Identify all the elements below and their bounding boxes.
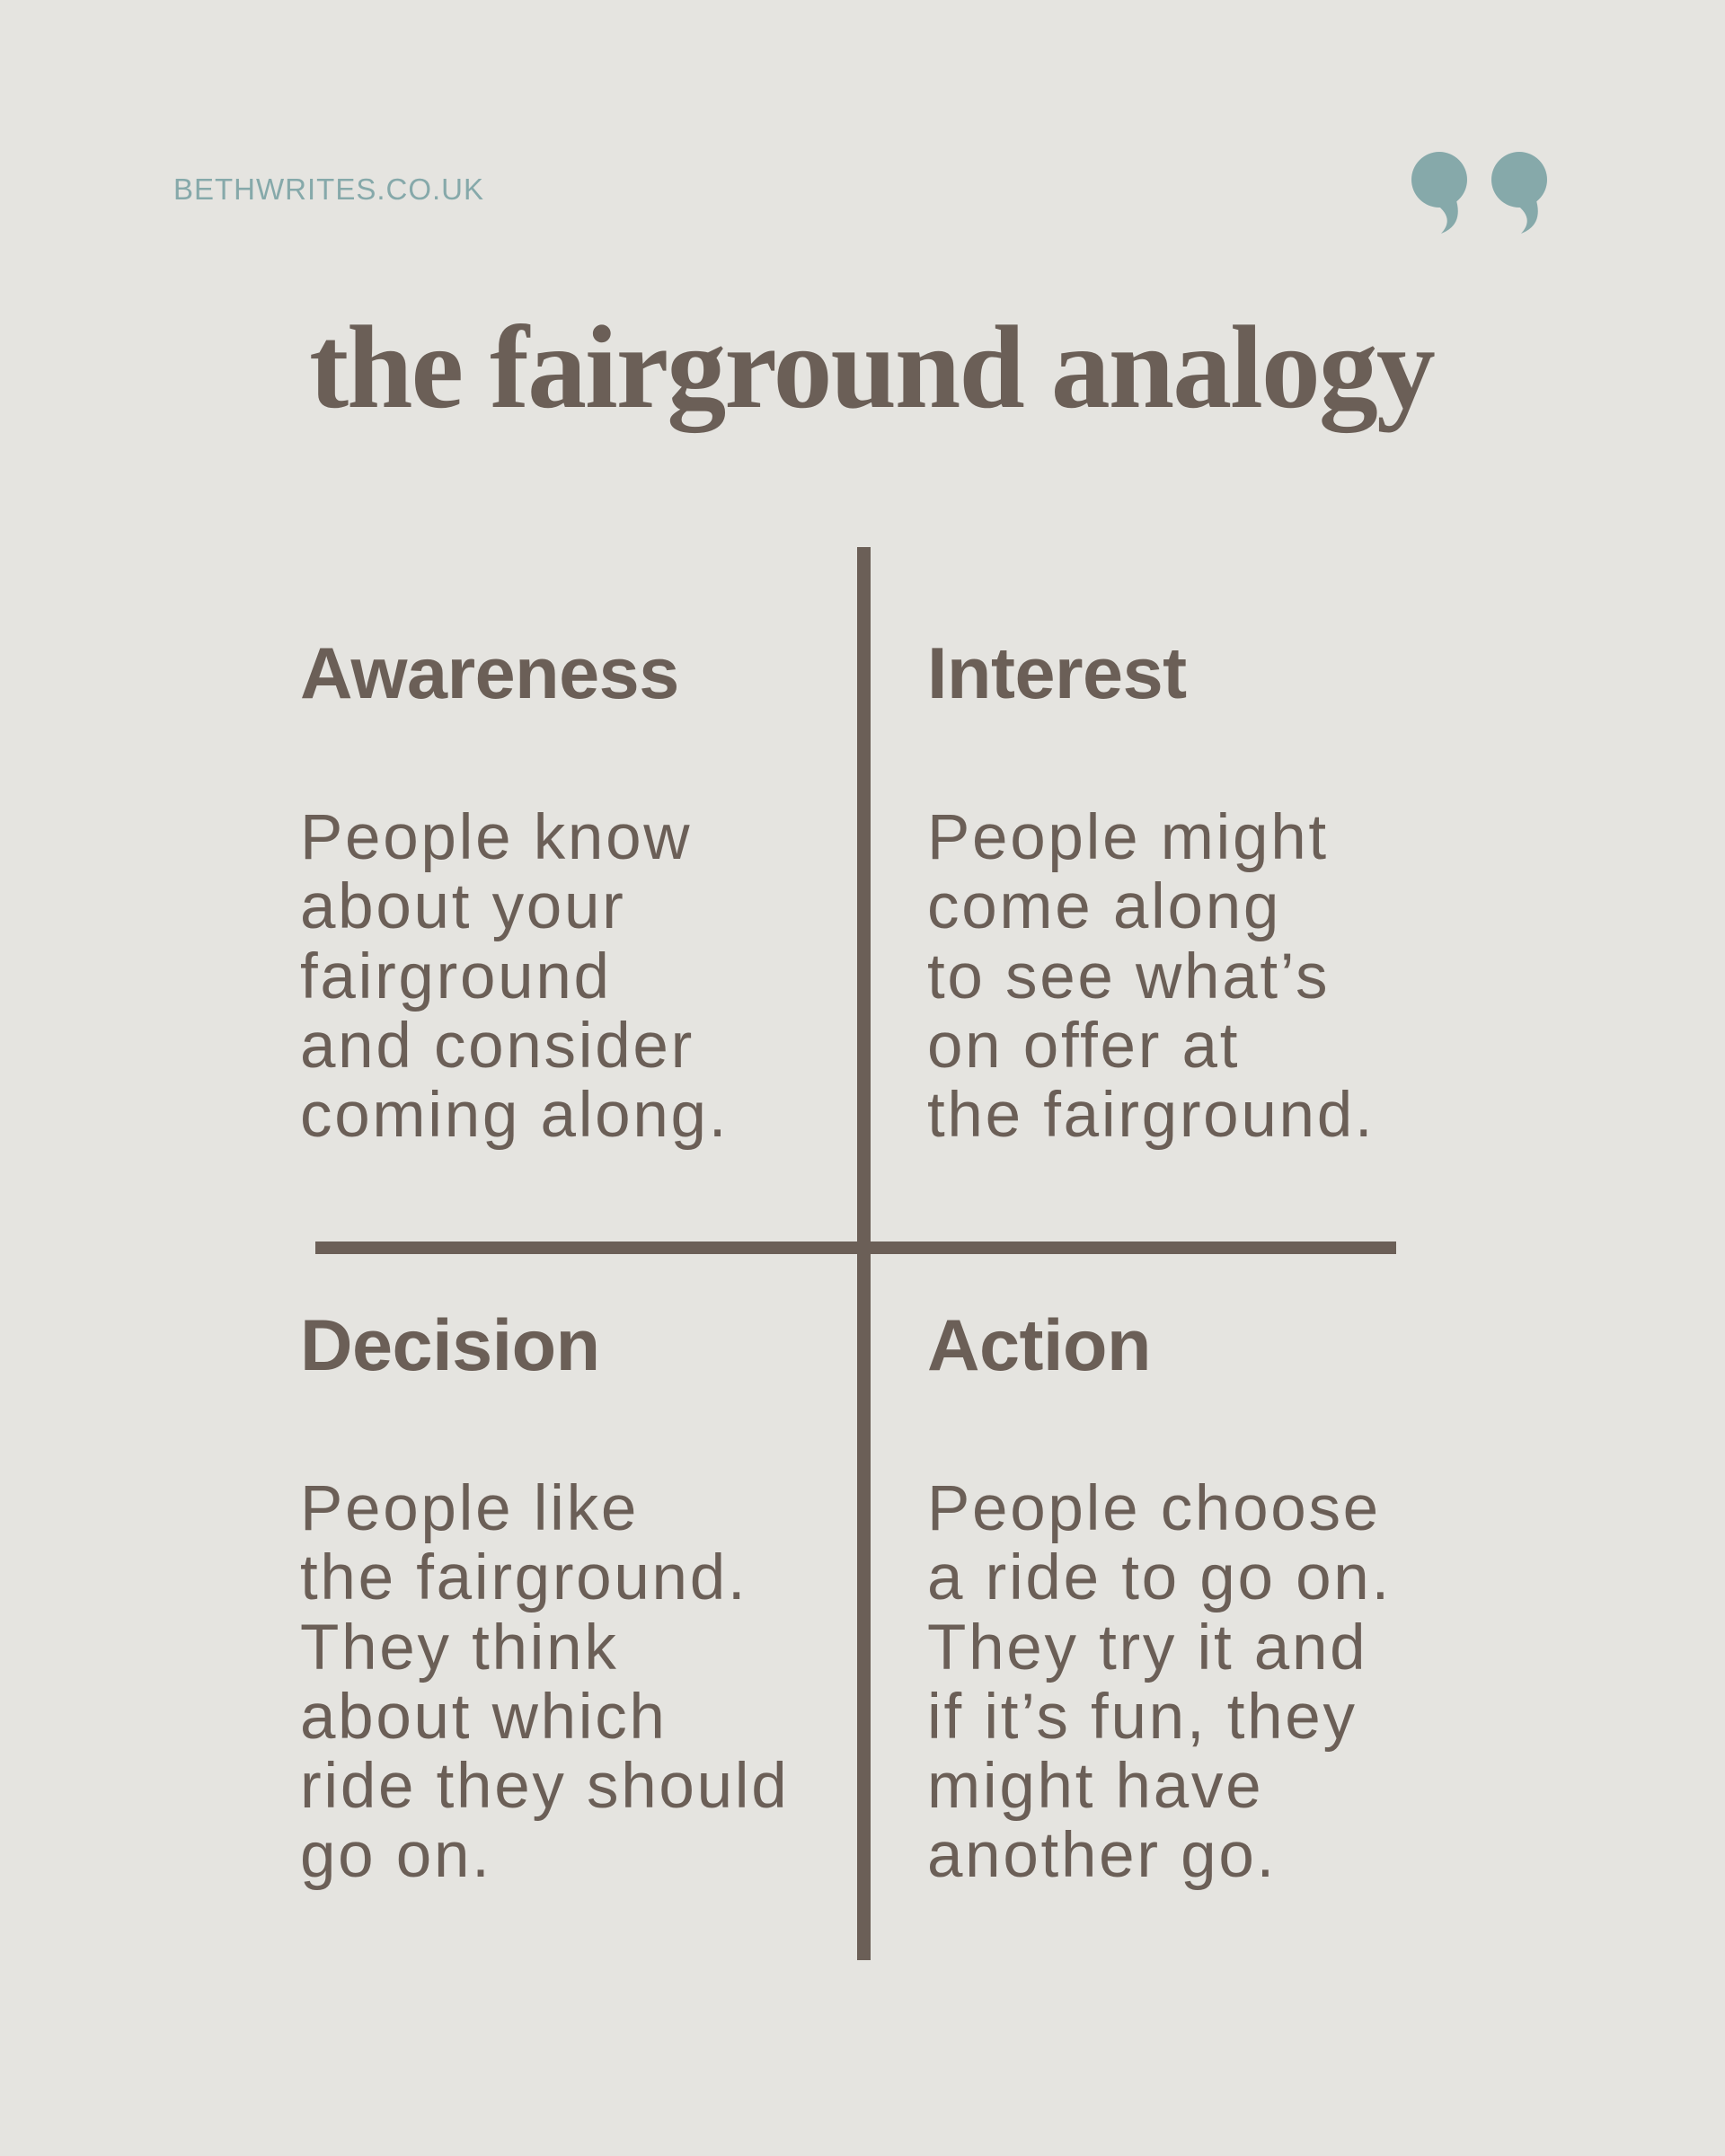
text: awareness: fairground [300, 941, 612, 1012]
text: awareness: coming along. [300, 1080, 729, 1151]
text: action [927, 1473, 1392, 1891]
text: awareness: about your [300, 871, 626, 942]
text: action: They try it and [927, 1613, 1367, 1683]
site url: BETHWRITES.CO.UK [173, 172, 484, 206]
panel: awareness [300, 633, 729, 1151]
text: interest: on offer at [927, 1011, 1240, 1082]
text: interest: to see what’s [927, 941, 1330, 1012]
heading: awareness: Awareness [300, 633, 679, 714]
heading: decision: Decision [300, 1305, 600, 1386]
text: awareness: and consider [300, 1011, 694, 1082]
text: decision: about which [300, 1682, 668, 1753]
panel: interest [927, 633, 1375, 1151]
text: action: another go. [927, 1820, 1277, 1891]
text: decision: People like [300, 1473, 639, 1544]
panel: action [927, 1305, 1392, 1891]
text: awareness: People know [300, 802, 692, 873]
panel: decision [300, 1305, 789, 1891]
text: decision: the fairground. [300, 1542, 748, 1613]
text: decision: go on. [300, 1820, 492, 1891]
text: action: if it’s fun, they [927, 1682, 1358, 1753]
text: awareness [300, 802, 729, 1151]
text: decision [300, 1473, 789, 1891]
text: action: a ride to go on. [927, 1542, 1392, 1613]
vertical divider [857, 547, 871, 1960]
horizontal divider [315, 1241, 1396, 1254]
text: interest: the fairground. [927, 1080, 1375, 1151]
text: interest [927, 802, 1375, 1151]
heading: interest: Interest [927, 633, 1187, 714]
text: action: People choose [927, 1473, 1381, 1544]
heading: action: Action [927, 1305, 1151, 1386]
text: interest: come along [927, 871, 1281, 942]
icon: quote marks [1411, 152, 1547, 234]
title: the fairground analogy [309, 301, 1434, 433]
text: action: might have [927, 1751, 1263, 1822]
text: decision: ride they should [300, 1751, 789, 1822]
text: interest: People might [927, 802, 1329, 873]
text: decision: They think [300, 1613, 619, 1683]
